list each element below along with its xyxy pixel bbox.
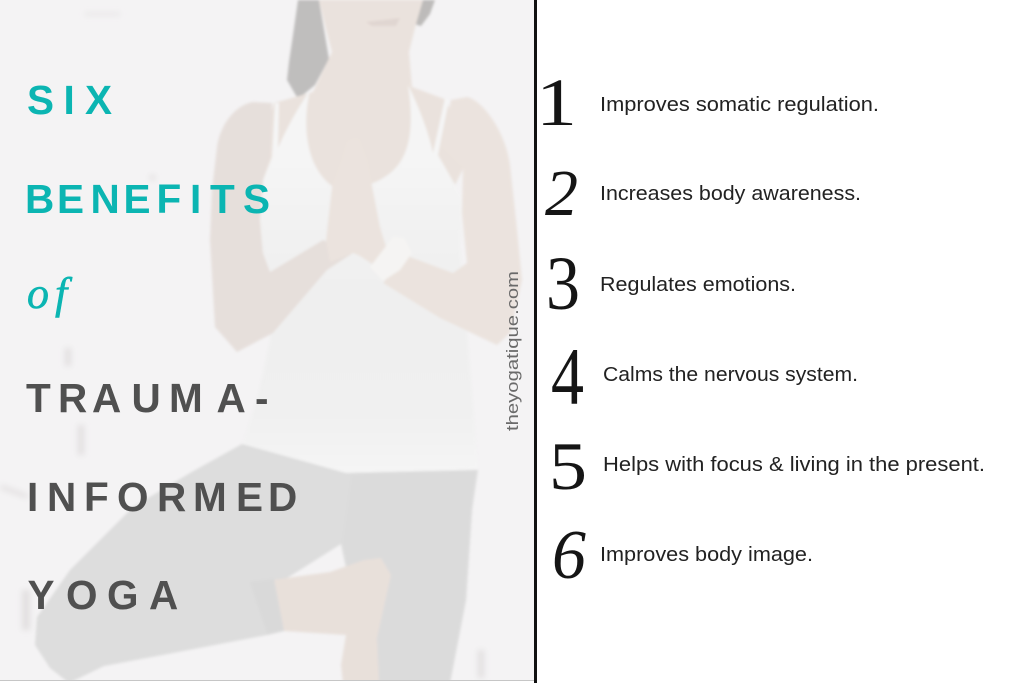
title line: INFORMED: INFORMED [27,474,297,520]
benefit 4: 4 [551,331,584,422]
right arm [383,97,522,345]
title line: BENEFITS: BENEFITS [25,176,270,222]
hair [287,0,329,99]
divider line [534,0,537,683]
title line: TRAUMA-: TRAUMA- [26,375,268,421]
benefit 3: 3 [546,242,580,326]
benefit 4 [551,331,858,422]
benefit 6: Improves body image. [600,544,813,566]
title line: of: of [27,269,73,318]
skin: face, neck and chest [268,0,464,186]
watch [376,248,409,276]
benefit 1: Improves somatic regulation. [600,94,879,116]
raised foot [272,558,391,683]
title line: SIX: SIX [27,77,112,123]
benefit 5: 5 [549,428,587,504]
title [25,77,297,618]
legging cuff [249,579,284,635]
tank top [262,88,455,215]
benefit 2: Increases body awareness. [600,183,861,205]
benefit 4: Calms the nervous system. [603,364,858,386]
benefit 2: 2 [545,157,578,230]
panel: faded yoga photo [0,0,534,683]
title line: YOGA: YOGA [28,572,178,618]
benefit 2 [545,157,861,230]
benefit 5: Helps with focus & living in the present. [603,454,985,476]
benefit 5 [549,428,985,504]
list of benefits [536,64,985,594]
benefit 1 [536,64,879,140]
benefit 3: Regulates emotions. [600,274,796,296]
website credit: theyogatique.com [503,271,522,431]
leggings [35,444,478,683]
left arm [210,102,353,352]
benefit 1: 1 [536,64,577,140]
benefit 6 [552,517,813,594]
benefit 3 [546,242,796,326]
praying hands [326,184,386,264]
benefit 6: 6 [552,517,586,594]
